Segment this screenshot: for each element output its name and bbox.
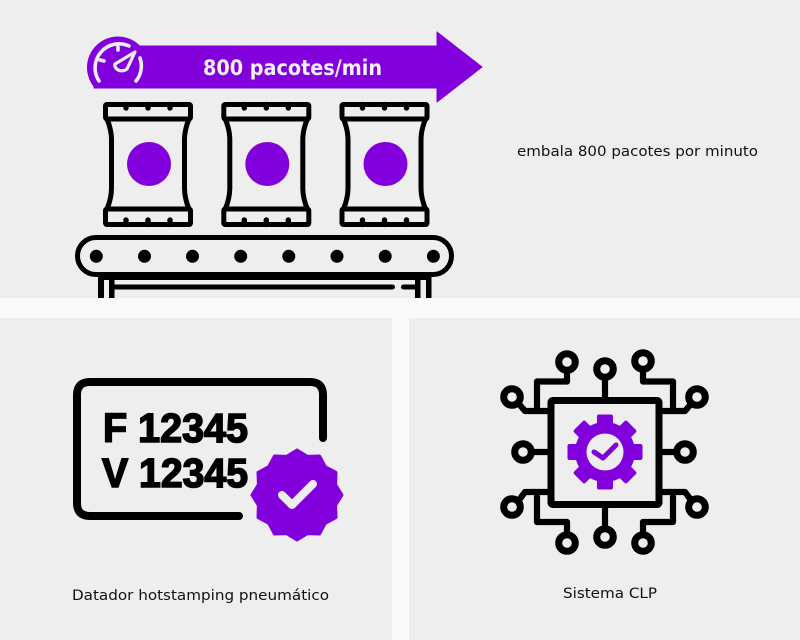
icon: package 3 — [342, 104, 427, 224]
panel: hotstamping dater — [0, 318, 392, 640]
icon: conveyor belt — [78, 238, 452, 298]
icon: verified badge — [252, 450, 342, 540]
arrow label: 800 pacotes/min — [203, 56, 382, 80]
caption: speed: embala 800 pacotes por minuto — [517, 144, 758, 160]
icon: speedometer — [95, 44, 141, 81]
panel: PLC system — [409, 318, 800, 640]
icon: date label frame — [77, 382, 323, 516]
date code lines: V 12345 — [102, 450, 248, 496]
icon: package 1 — [106, 104, 190, 224]
caption: PLC: Sistema CLP — [563, 586, 657, 602]
panel: packaging speed — [0, 0, 800, 298]
date code lines — [102, 405, 248, 496]
arrow: 800 pacotes/min — [84, 32, 482, 102]
icon: circuit chip — [504, 353, 705, 551]
caption: dater: Datador hotstamping pneumático — [72, 588, 329, 604]
icon: gear with check — [568, 414, 642, 490]
date code lines: F 12345 — [103, 405, 248, 451]
icon: package 2 — [224, 104, 309, 224]
